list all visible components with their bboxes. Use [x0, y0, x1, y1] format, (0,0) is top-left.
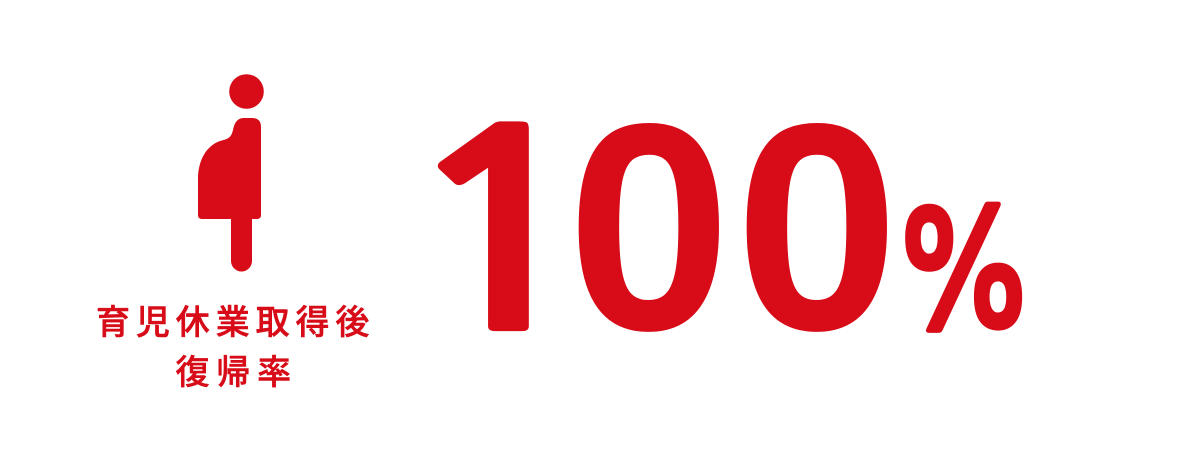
label: return rate after childcare leave: 復帰率 — [176, 354, 298, 392]
value: 100%: 1 — [394, 100, 607, 370]
value: 100%: 0 — [735, 62, 899, 392]
value: 100%: % — [891, 194, 1037, 353]
value: 100% — [394, 62, 1037, 392]
value: 100%: 0 — [567, 62, 731, 392]
label: return rate after childcare leave: 育児休業取得後 — [96, 304, 375, 342]
label: return rate after childcare leave — [96, 304, 375, 392]
icon: pregnant person — [198, 74, 264, 272]
